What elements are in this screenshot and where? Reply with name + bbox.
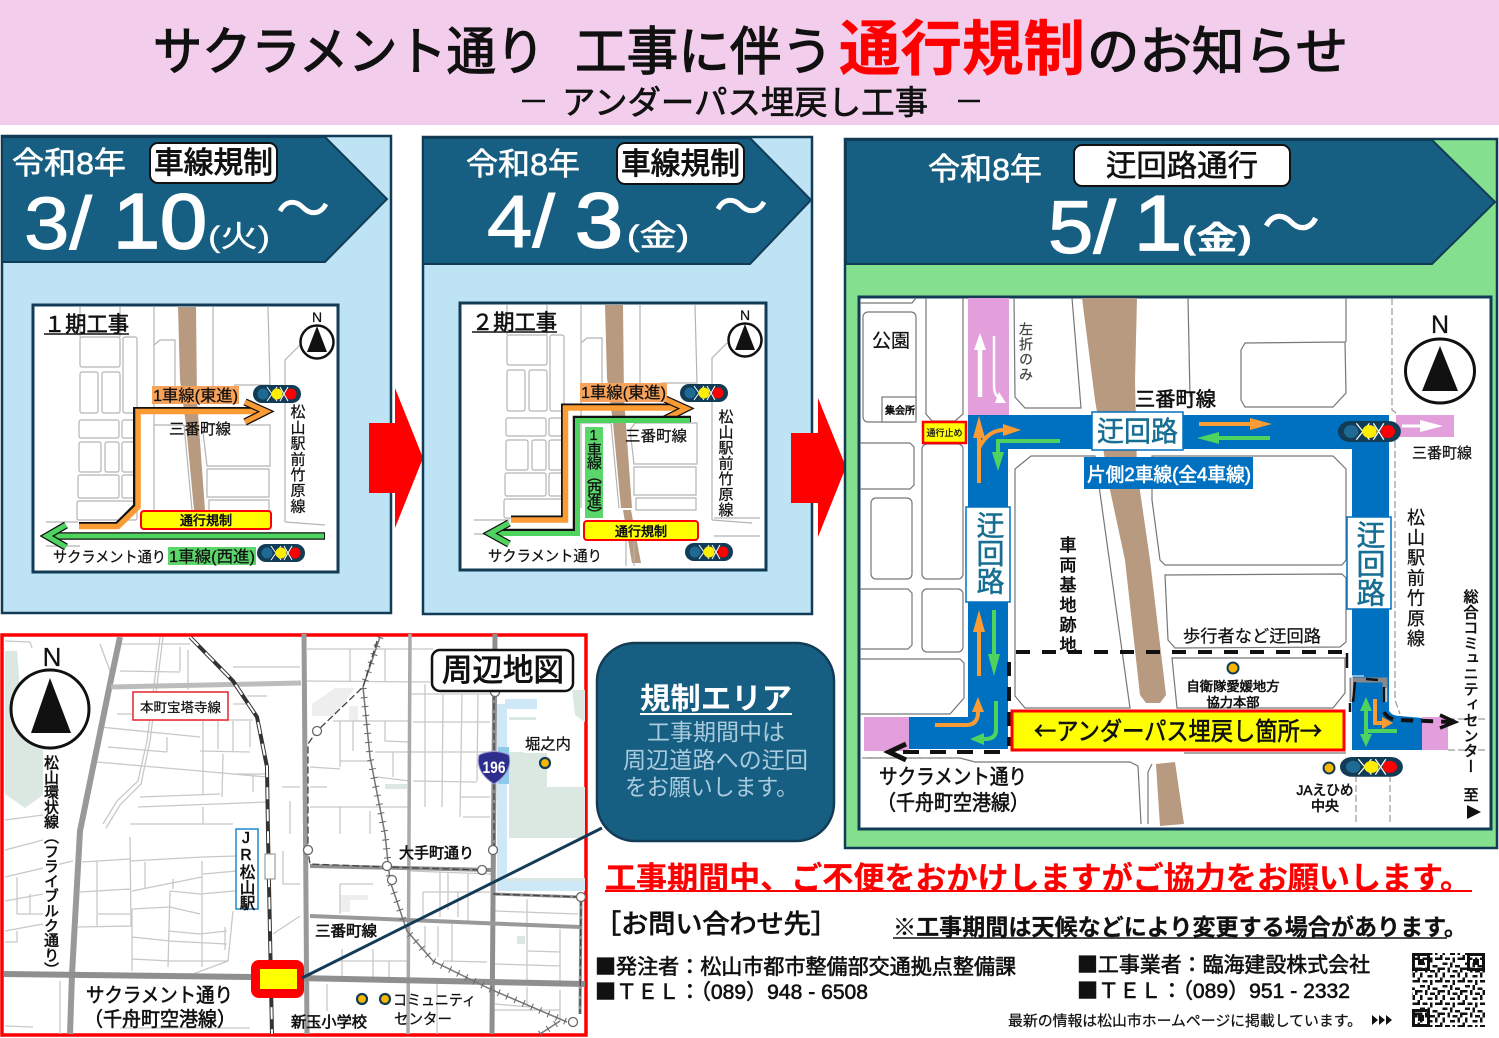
callout: regulated area <box>597 643 834 841</box>
label: Chifunemachi airport line: （千舟町空港線） <box>84 1008 236 1031</box>
label: Sanbancho line east: 三番町線 <box>1412 445 1472 462</box>
title: main heading: 通行規制 <box>839 16 1085 83</box>
heading: phase 2: ２期工事 <box>472 310 557 335</box>
date banner: 5/1 <box>846 140 1495 269</box>
date banner: 4/3: 4/ <box>487 180 555 263</box>
callout: regulated area: 規制エリア <box>640 683 792 716</box>
label: restriction <box>141 511 271 529</box>
label: detour west: 迂回路 <box>974 511 1004 595</box>
label: underpass backfill location: ←アンダーパス埋戻し箇所→ <box>1034 712 1322 748</box>
arrow: next phase 2 <box>791 398 846 537</box>
arrow: westbound green <box>490 419 691 544</box>
title band <box>0 0 1499 125</box>
landmark: JA <box>1296 762 1354 814</box>
route badge 196: 196 <box>482 758 506 777</box>
date banner: 4/3: (金) <box>627 220 689 253</box>
label: detour east: 迂回路 <box>1352 520 1384 607</box>
label: Sacramento street: サクラメント通り <box>488 548 602 565</box>
map: phase 1 <box>33 305 338 572</box>
label: hall: 集会所 <box>885 404 915 417</box>
date banner: 4/3: 〜 <box>714 178 768 238</box>
route badge 196 <box>478 752 510 784</box>
date banner: 3/10: 車線規制 <box>154 147 273 180</box>
label: station road: 松山駅前竹原線 <box>288 404 306 514</box>
panel: phase 2 lane restriction <box>423 137 812 614</box>
label: community center direction: 総合コミュニティセンター <box>1462 589 1478 774</box>
label: detour west <box>966 507 1010 602</box>
compass: N <box>312 309 322 325</box>
date banner: 3/10: 10 <box>113 177 207 265</box>
label: Horinouchi <box>524 736 572 768</box>
date banner: 5/1: 〜 <box>1262 192 1320 257</box>
contact: contractor: ■工事業者：臨海建設株式会社 <box>1077 949 1370 979</box>
heading: phase 1: １期工事 <box>44 312 129 337</box>
title: main heading: 工事に伴う <box>575 24 833 82</box>
QR code <box>1412 953 1485 1027</box>
label: restriction <box>584 521 698 540</box>
arrows on detour <box>935 416 1397 747</box>
date banner: 3/10: (火) <box>208 221 270 254</box>
title: main heading <box>153 16 1348 83</box>
landmark: SDF office <box>1186 662 1280 710</box>
contact: client: ■ＴＥＬ：（089）948 - 6508 <box>595 976 868 1006</box>
landmark: SDF office: 協力本部 <box>1206 695 1260 710</box>
date banner: 5/1: 1 <box>1134 179 1182 267</box>
label: lanes: 片側2車線(全4車線) <box>1087 464 1251 486</box>
label: Otemachi street: 大手町通り <box>399 845 474 862</box>
label: Sacramento street: サクラメント通り <box>53 549 166 566</box>
date banner: 3/10: 3/ <box>24 182 92 265</box>
label: lanes <box>1084 457 1253 489</box>
label: Horinouchi: 堀之内 <box>525 736 571 753</box>
label: westbound lane vertical: 1車線（西進） <box>585 427 602 520</box>
label: left turn only: 左折のみ <box>1018 322 1034 382</box>
compass <box>728 307 762 356</box>
label: Sacramento street <box>877 766 1029 815</box>
label: community center direction: 至 <box>1462 787 1478 802</box>
label: school: 新玉小学校 <box>291 1014 367 1031</box>
heading: contact: ［お問い合わせ先］ <box>594 909 838 939</box>
label: Sanbancho line: 三番町線 <box>625 428 687 445</box>
arrow: eastbound orange <box>511 399 686 520</box>
panel: phase 1 lane restriction <box>2 136 391 613</box>
notice: cooperation request: 工事期間中、ご不便をおかけしますがご協力をお願いします。 <box>605 861 1471 896</box>
label: depot site: 車両基地跡地 <box>1056 536 1076 656</box>
callout: regulated area: 周辺道路への迂回 <box>623 747 808 773</box>
label: eastbound lane: 1車線(東進) <box>153 387 238 405</box>
contact: contractor: ■ＴＥＬ：（089）951 - 2332 <box>1077 975 1350 1005</box>
date banner: 5/1: 5/ <box>1048 186 1116 269</box>
date banner: 3/10: 〜 <box>276 180 330 240</box>
pink: south east end <box>1392 717 1448 750</box>
date banner: 4/3 <box>423 138 811 264</box>
date banner: 4/3: 車線規制 <box>621 148 740 181</box>
road: east end <box>1352 700 1422 750</box>
landmark: JA: 中央 <box>1311 798 1339 814</box>
label: Sanbancho line: 三番町線 <box>1135 388 1216 411</box>
compass <box>300 309 334 358</box>
label: Sanbancho line: 三番町線 <box>315 923 377 940</box>
marker: work area <box>251 960 304 998</box>
contact: client <box>595 951 1016 1006</box>
landmark: community center: コミュニティ <box>393 992 476 1009</box>
label: Sacramento street: サクラメント通り <box>879 766 1027 789</box>
panel: surrounding area map <box>2 634 586 1035</box>
contact: contractor <box>1077 949 1370 1005</box>
compass <box>1406 311 1474 403</box>
label: Sacramento street: （千舟町空港線） <box>877 792 1029 815</box>
callout: regulated area: をお願いします。 <box>625 774 798 800</box>
signal <box>680 384 728 402</box>
arrow: next phase 1 <box>369 388 423 528</box>
road: detour blue <box>909 415 1389 750</box>
note: website: 最新の情報は松山市ホームページに掲載しています。 <box>1008 1013 1362 1030</box>
closed road: north pink <box>968 298 1009 415</box>
label: closure <box>923 422 966 443</box>
note: schedule may change: ※工事期間は天候などにより変更する場合があります。 <box>893 914 1467 940</box>
compass: N <box>740 307 750 323</box>
signal <box>1340 757 1403 777</box>
label: westbound lane: 1車線(西進) <box>169 548 255 566</box>
label: station road: 松山駅前竹原線 <box>1405 508 1425 649</box>
landmark: community center: センター <box>394 1011 452 1028</box>
label: Sacramento street: サクラメント通り <box>86 984 233 1007</box>
date banner: 3/10 <box>2 137 387 265</box>
label: detour east <box>1347 517 1391 609</box>
arrow: westbound green <box>47 525 325 547</box>
label: park: 公園 <box>872 330 910 352</box>
subtitle: アンダーパス埋戻し工事 <box>562 84 928 121</box>
pink: west end <box>864 717 909 751</box>
signal <box>257 544 305 562</box>
callout: regulated area: 工事期間中は <box>647 719 785 745</box>
landmark: SDF office: 自衛隊愛媛地方 <box>1186 679 1280 694</box>
date banner: 5/1: (金) <box>1182 220 1252 256</box>
label: Sanbancho line: 三番町線 <box>169 421 231 438</box>
label: station road: 松山駅前竹原線 <box>716 409 734 518</box>
heading: area map: 周辺地図 <box>442 653 564 688</box>
landmark: community center <box>357 992 476 1028</box>
date banner: 5/1: 令和8年 <box>928 152 1042 187</box>
label: ring road: 松山環状線（フライブルク通り） <box>42 755 58 977</box>
contact: client: ■発注者：松山市都市整備部交通拠点整備課 <box>595 951 1016 981</box>
label: restriction: 通行規制 <box>615 524 667 539</box>
city blocks <box>860 298 1488 826</box>
pedestrian dashed route <box>889 652 1455 760</box>
label: restriction: 通行規制 <box>180 513 232 528</box>
label: Honmachi road <box>133 692 228 720</box>
signal <box>685 543 733 561</box>
arrow: eastbound orange <box>79 402 266 526</box>
date banner: 5/1: 迂回路通行 <box>1106 150 1258 183</box>
label: closure: 通行止め <box>926 427 963 438</box>
signal <box>253 385 301 403</box>
panel: detour <box>845 139 1497 848</box>
compass <box>11 642 89 748</box>
leader line <box>302 828 602 978</box>
label: detour north: 迂回路 <box>1097 416 1178 447</box>
landmark: JA: JAえひめ <box>1296 782 1354 798</box>
label: pedestrian detour: 歩行者など迂回路 <box>1183 627 1321 646</box>
label: eastbound lane: 1車線(東進) <box>581 384 666 402</box>
title: main heading: のお知らせ <box>1087 24 1348 82</box>
signal <box>1338 421 1401 442</box>
compass: N <box>43 642 61 672</box>
label: JR station: JR松山駅 <box>238 830 255 911</box>
date banner: 3/10: 令和8年 <box>12 146 126 181</box>
label: Honmachi road: 本町宝塔寺線 <box>140 700 221 715</box>
date banner: 4/3: 3 <box>575 176 623 264</box>
compass: N <box>1431 311 1449 339</box>
title: main heading: サクラメント通り <box>153 24 545 82</box>
map: detour route <box>859 297 1491 829</box>
map base <box>4 634 586 1034</box>
date banner: 4/3: 令和8年 <box>466 147 580 182</box>
map: phase 2 <box>460 303 766 570</box>
pink: east of Sanbancho <box>1396 415 1454 437</box>
